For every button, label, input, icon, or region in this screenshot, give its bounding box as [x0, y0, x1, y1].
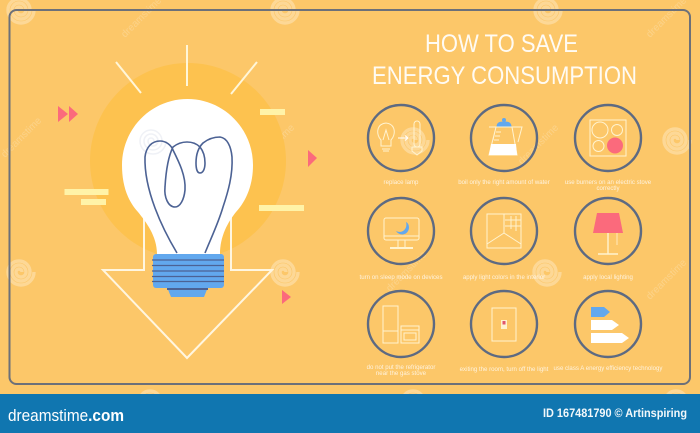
icon: room interior: [487, 214, 521, 248]
captions: use class A energy efficiency technology: [554, 365, 663, 372]
captions: correctly: [596, 185, 620, 192]
captions: [360, 179, 663, 377]
captions: near the gas stove: [376, 370, 427, 377]
glow circle: [90, 63, 286, 259]
light bulb: [122, 99, 253, 297]
footer logo: dreamstime.com: [8, 406, 124, 425]
icon: light switch: [492, 308, 516, 341]
footer credit: ID 167481790 © Artinspiring: [543, 406, 687, 420]
captions: exiting the room, turn off the light: [460, 366, 549, 373]
captions: do not put the refrigerator: [367, 364, 435, 371]
title: [372, 30, 637, 90]
icon: fridge and stove: [383, 306, 419, 343]
lamp base: [153, 254, 224, 288]
down arrow outline: [103, 217, 272, 358]
captions: use burners on an electric stove: [565, 179, 652, 186]
watermark text: dreamstime: [384, 249, 429, 294]
watermark text: [0, 0, 689, 302]
title: ENERGY CONSUMPTION: [372, 62, 637, 90]
pink triangles: [58, 106, 317, 304]
title: HOW TO SAVE: [425, 30, 578, 58]
captions: turn on sleep mode on devices: [360, 274, 442, 281]
rays: [116, 45, 257, 94]
filament: [145, 137, 232, 253]
captions: replace lamp: [384, 179, 419, 186]
watermark text: dreamstime: [644, 257, 689, 302]
bulb glass: [122, 99, 253, 254]
icon: kettle: [489, 118, 522, 155]
watermark text: dreamstime: [0, 115, 44, 160]
captions: apply local lighting: [583, 274, 633, 281]
icon: energy class bars: [591, 307, 629, 343]
accent bars: [64, 109, 304, 211]
icon circles: [368, 105, 641, 357]
icon: monitor sleep: [384, 218, 419, 249]
lamp base bottom: [167, 287, 208, 297]
watermark text: dreamstime: [516, 122, 561, 167]
footer bar: [0, 394, 700, 433]
thread lines: [152, 260, 224, 282]
icon: replace lamp: [378, 121, 422, 155]
icon: electric stove: [590, 120, 626, 156]
icon: table lamp: [593, 213, 623, 254]
watermark spiral on glass: [140, 130, 166, 154]
watermark text: dreamstime: [252, 122, 297, 167]
captions: boil only the right amount of water: [458, 179, 550, 186]
captions: apply light colors in the interior: [463, 274, 545, 281]
